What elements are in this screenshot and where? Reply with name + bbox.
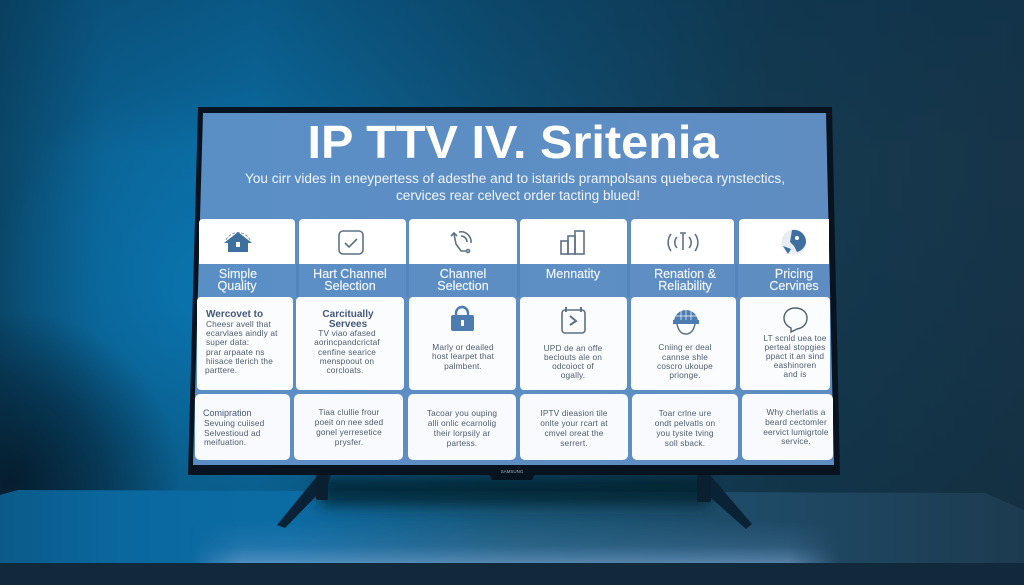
icon: signal waves [668, 233, 698, 251]
icon: calendar play [562, 307, 585, 333]
middle card text 6: and is [783, 369, 807, 379]
icon: bar chart [561, 231, 584, 254]
column heading: Simple Quality: Quality [218, 279, 257, 293]
column heading: Renation and Reliability: Renation & [654, 267, 717, 281]
subtitle line 2: cervices rear celvect order tacting blued! [396, 188, 640, 203]
column heading: Simple Quality [218, 267, 257, 293]
middle card text 1: Wercovet to [206, 309, 263, 320]
bottom card text 2: poeit on nee sded [315, 417, 383, 427]
middle card text 5 [657, 342, 713, 380]
icon: satellite arrows [451, 232, 471, 252]
column heading: Channel Selection: Selection [437, 279, 489, 293]
bottom card text 2: gonel yerresetice [316, 427, 382, 437]
middle card text 4: UPD de an offe [544, 343, 603, 353]
icon: padlock [451, 307, 474, 331]
middle card text 2: TV viao afased [318, 328, 376, 338]
middle card text 2: menspoout on [320, 356, 374, 366]
column heading: Renation and Reliability: Reliability [658, 279, 712, 293]
bottom card text 4: onlte your rcart at [540, 418, 608, 428]
middle card text 6: LT scnld uea toe [764, 333, 827, 343]
bottom card text 5: ondt pelvatls on [655, 418, 715, 428]
middle card text 5: prionge. [669, 370, 701, 380]
middle card text 6 [764, 333, 827, 379]
bottom card text 3: Tacoar you ouping [427, 408, 497, 418]
column heading: Channel Selection [437, 267, 489, 293]
column heading: Renation and Reliability [654, 267, 717, 293]
middle card text 2: Servees [329, 319, 368, 330]
middle card text 1: super data: [206, 337, 249, 347]
tv brand badge [489, 469, 535, 480]
bottom card text 2 [315, 407, 383, 447]
bottom card text 2: Tiaa clullie frour [319, 407, 380, 417]
subtitle: You cirr vides in eneypertess of adesthe and to istarids prampolsans quebeca rynstectics, [245, 171, 785, 186]
icon: house [224, 232, 252, 252]
tv screen [193, 113, 834, 465]
middle card text 1: parttere. [205, 365, 237, 375]
title: IP TTV IV. Sritenia [308, 116, 719, 168]
middle card text 1: ecarvlaes aindly at [206, 328, 278, 338]
tv frame [188, 107, 840, 475]
tv stand left foot [277, 475, 331, 528]
column heading: Channel Selection: Channel [440, 267, 486, 281]
column heading: Pricing Cervines [769, 267, 819, 293]
column heading: Hart Channel Selection: Hart Channel [313, 267, 387, 281]
bottom card text 1: meifuation. [204, 437, 246, 447]
icon: globe helmet [673, 309, 699, 334]
bottom card text 5: Toar crlne ure [659, 408, 712, 418]
bottom card text 1: Comipration [203, 408, 252, 418]
bottom card text 1: Sevuing cuiised [204, 418, 265, 428]
bottom card text 6: Why cherlatis a [767, 407, 826, 417]
middle card text 3: host learpet that [432, 351, 495, 361]
middle card text 2: Carcitually [322, 309, 374, 320]
middle card text 4: ogally. [561, 370, 585, 380]
bottom card text 3 [427, 408, 497, 448]
bottom card text 5: you tysite tving [656, 428, 714, 438]
column heading: Pricing Cervines: Pricing [775, 267, 813, 281]
column heading: Mennatity: Mennatity [546, 267, 601, 281]
bottom card text 4: IPTV dieasion tile [540, 408, 608, 418]
bottom row cards [195, 394, 833, 460]
middle card text 3: palmbent. [444, 361, 482, 371]
middle card text 6: eashinoren [774, 360, 817, 370]
column heading: Hart Channel Selection: Selection [324, 279, 376, 293]
middle card text 2: aorincpandcrictaf [314, 337, 380, 347]
middle card text 5: Cniing er deal [658, 342, 712, 352]
middle card text 4: beclouts ale on [544, 352, 602, 362]
icon: checkbox [339, 231, 363, 254]
bottom card text 3: alli onlic ecarnolig [428, 418, 496, 428]
middle card text 6: perteal stopgies [765, 342, 825, 352]
tv brand badge: SAMSUNG [501, 469, 524, 474]
bottom card text 6: eervict lumigrtole [763, 427, 829, 437]
bottom card text 4: cmvel oreat the [545, 428, 604, 438]
column heading: Hart Channel Selection [313, 267, 387, 293]
bottom card text 3: their lorpsily ar [434, 428, 490, 438]
screen content [195, 116, 833, 460]
middle card text 4 [544, 343, 603, 380]
middle card text 3 [432, 342, 495, 371]
bottom card text 3: partess. [447, 438, 477, 448]
middle card text 5: cannse shle [662, 352, 708, 362]
middle card text 1 [205, 309, 278, 375]
middle card text 6: ppact it an sind [766, 351, 824, 361]
bottom card text 5: soll sback. [665, 438, 705, 448]
middle card text 1: hiisace tlerich the [206, 356, 273, 366]
middle card text 2: corcloats. [326, 365, 364, 375]
icon: pie [782, 230, 806, 254]
bottom card text 4: serrert. [560, 438, 588, 448]
header band dividers [296, 264, 738, 297]
middle card text 1: prar arpaate ns [206, 347, 265, 357]
bottom card text 4 [540, 408, 608, 448]
shelf surface [0, 476, 1024, 564]
bottom card text 5 [655, 408, 715, 448]
bottom card text 2: prysfer. [335, 437, 363, 447]
bottom card text 1: Selvestioud ad [204, 428, 261, 438]
bottom card text 6: service. [781, 436, 811, 446]
tv stand right foot [697, 475, 752, 529]
bottom card text 1 [203, 408, 265, 447]
shelf front edge [0, 563, 1024, 585]
top row icon cards [199, 219, 829, 264]
bottom card text 6 [763, 407, 829, 446]
column heading: Pricing Cervines: Cervines [769, 279, 819, 293]
icon: speech bubble [784, 308, 807, 332]
middle row cards [197, 297, 830, 390]
middle card text 1: Cheesr avell that [206, 319, 271, 329]
middle card text 4: odcoioct of [552, 361, 594, 371]
middle card text 3: Marly or deailed [432, 342, 494, 352]
bottom card text 6: beard cectomler [765, 417, 827, 427]
middle card text 5: coscro ukoupe [657, 361, 713, 371]
column heading: Simple Quality: Simple [219, 267, 257, 281]
middle card text 2: cenfine searice [318, 347, 376, 357]
middle card text 2 [314, 309, 380, 375]
